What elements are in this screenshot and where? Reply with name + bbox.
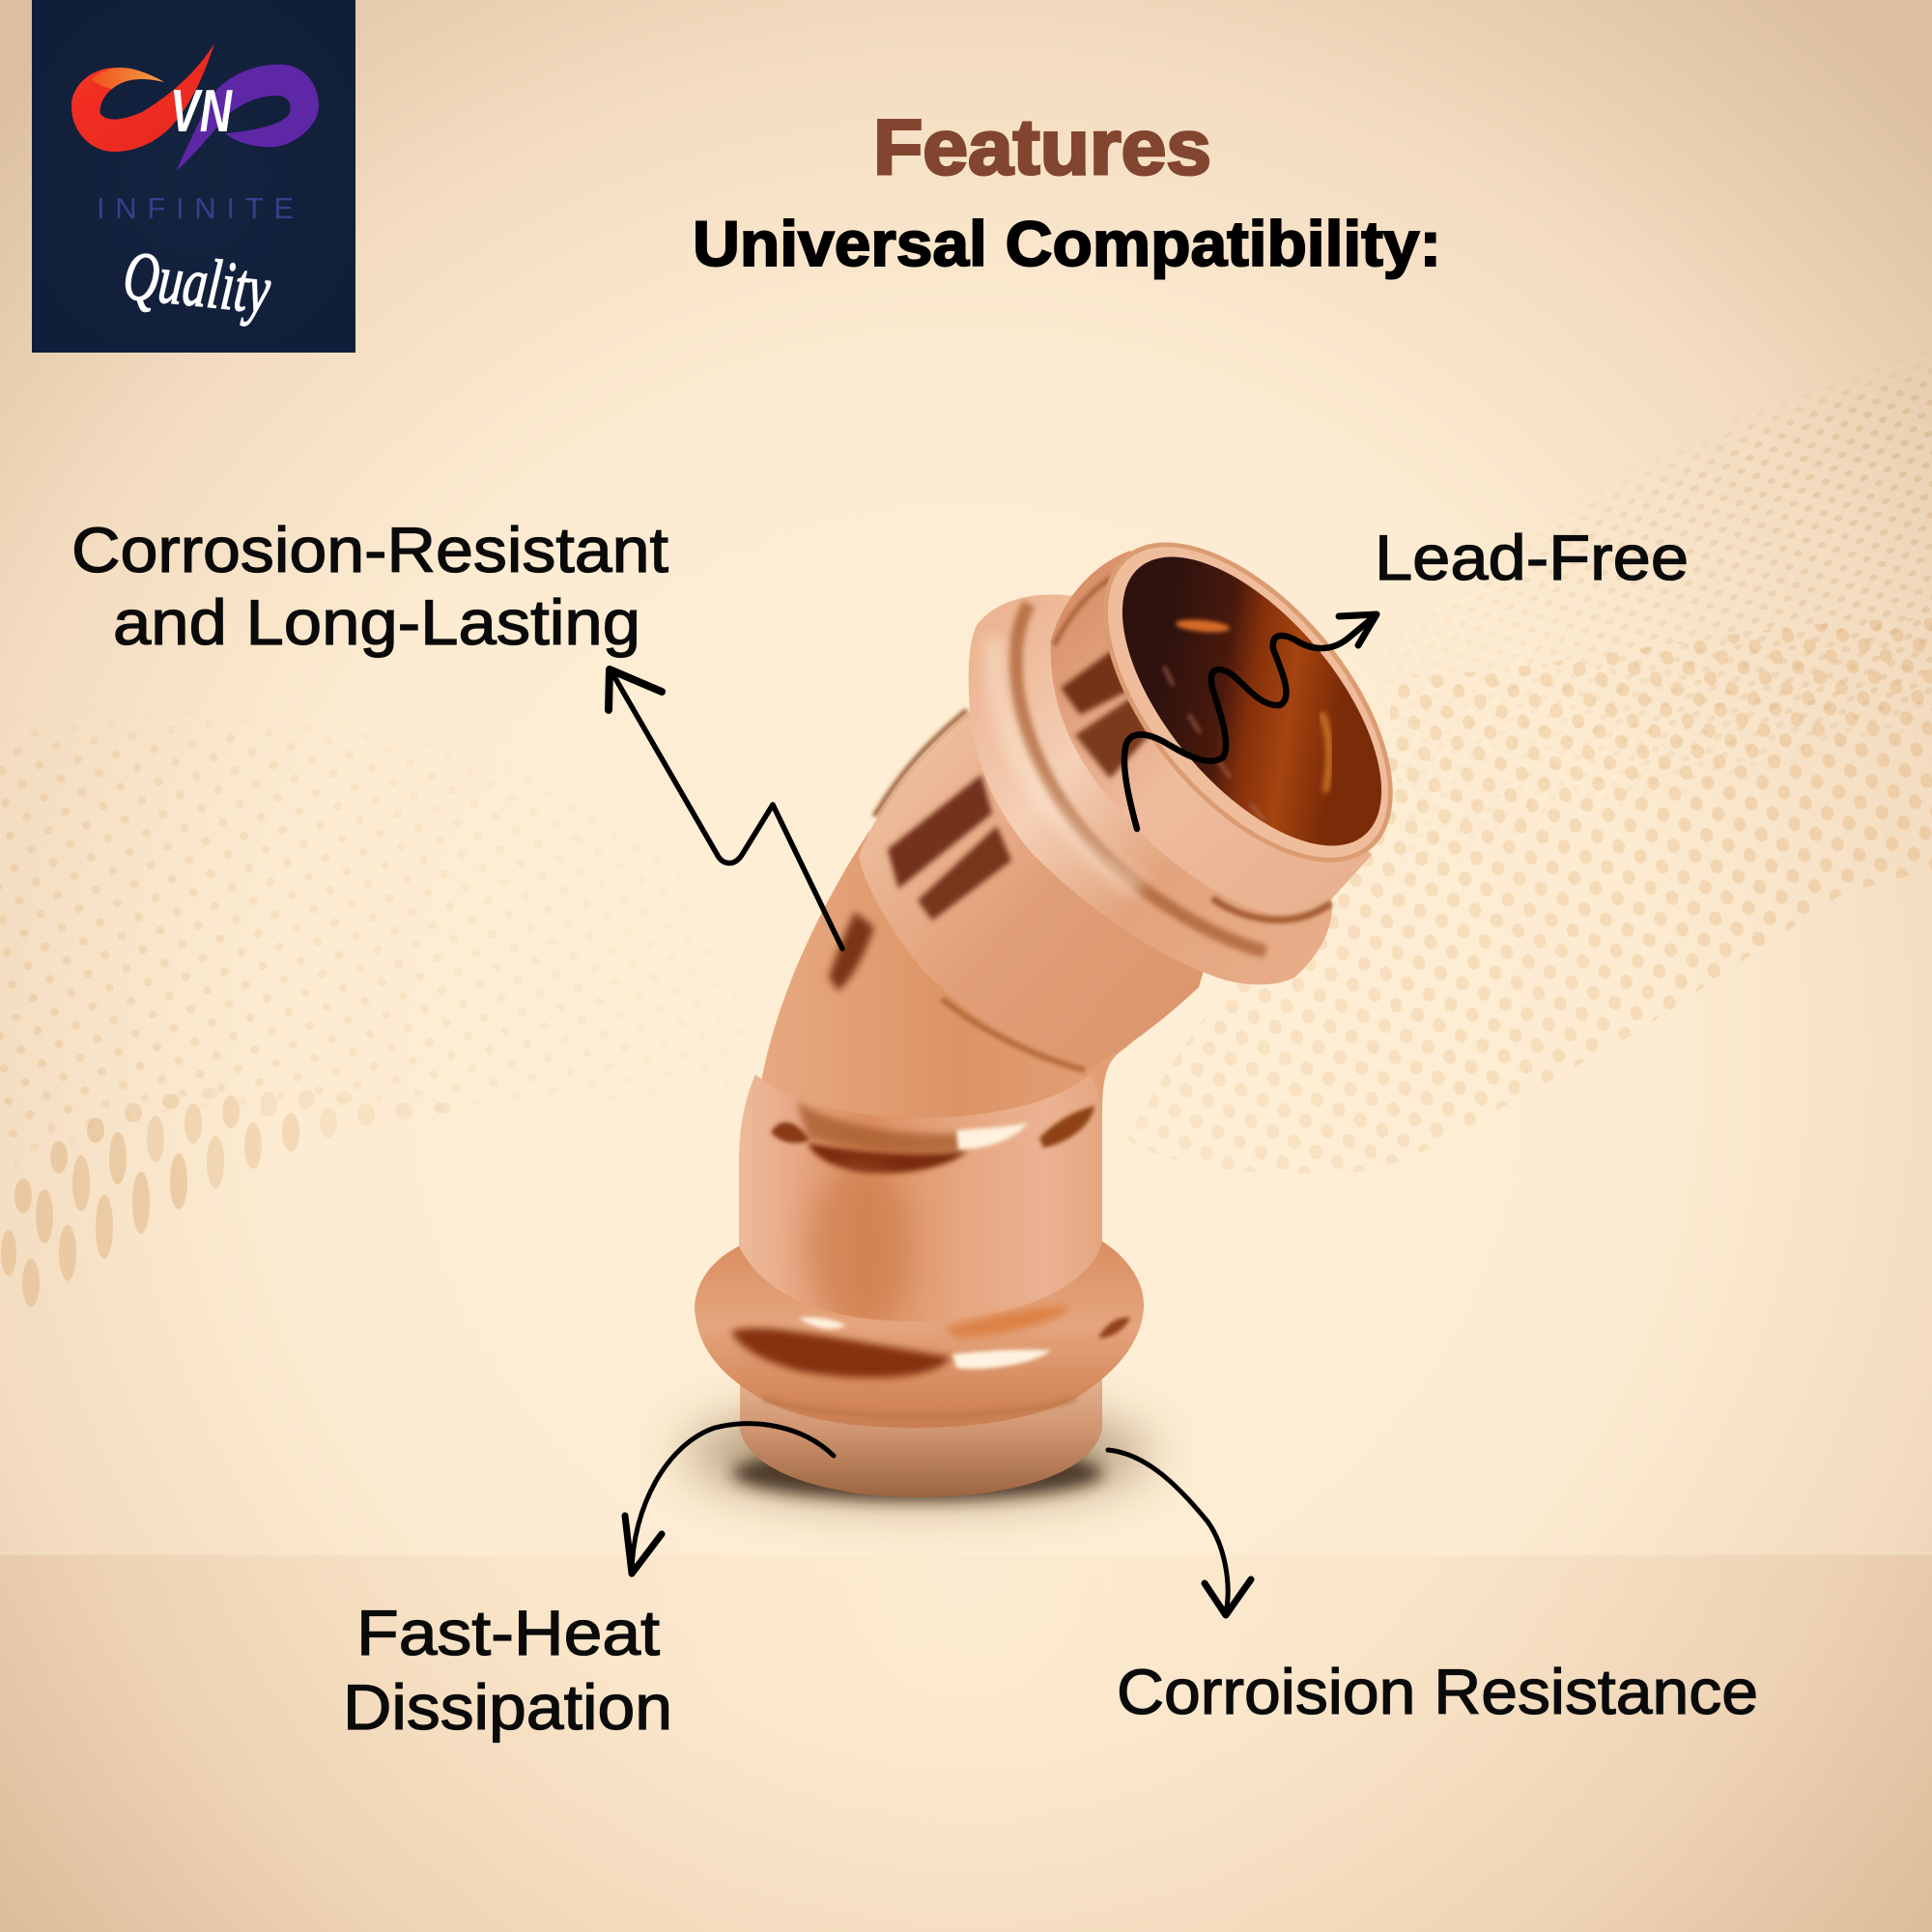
label: corrosion-resistant: and Long-Lasting (113, 586, 640, 658)
label: corrosion-resistant: Corrosion-Resistant (71, 514, 668, 585)
dark reflection on elbow (829, 912, 874, 991)
subtitle: Universal Compatibility: (693, 208, 1441, 279)
ground shadow (686, 1407, 1150, 1500)
top groove reflections (771, 1101, 1094, 1174)
label: fast-heat dissipation (343, 1597, 672, 1743)
arrow: zigzag to corrosion-resistant (609, 669, 842, 949)
label: corroision resistance: Corroision Resistance (1117, 1656, 1758, 1727)
arrow: curved to corroision resistance (1108, 1450, 1251, 1615)
logo text: INFINITE: INFINITE (97, 191, 294, 225)
title: Features (873, 104, 1211, 191)
arrow: curved to fast-heat dissipation (625, 1424, 834, 1574)
bottom band (0, 1555, 1932, 1932)
dot wave: left (0, 724, 605, 1167)
flange ring (969, 595, 1332, 984)
arrow: wavy to lead-free (1124, 614, 1377, 829)
base stub (740, 1367, 1102, 1497)
body tonal patch (807, 1169, 913, 1323)
label: fast-heat dissipation: Fast-Heat (356, 1597, 660, 1668)
top socket (1051, 551, 1372, 920)
dot wave: right upper faint (1455, 364, 1932, 784)
logo mark: purple loop (176, 65, 319, 172)
bottom flare ring (695, 1241, 1144, 1428)
copper elbow fitting (686, 492, 1447, 1500)
label: lead-free: Lead-Free (1375, 522, 1689, 593)
logo mark: red loop (71, 43, 214, 152)
logo mark: VN letters: VN (170, 78, 233, 145)
dot wave: right (1126, 618, 1932, 1174)
middle angled socket (859, 707, 1208, 1070)
pipe mouth (1049, 492, 1447, 913)
vertical cylinder (739, 1074, 1102, 1347)
elbow bend (758, 831, 1198, 1169)
logo text: Quality: Quality (120, 237, 274, 328)
label: fast-heat dissipation: Dissipation (343, 1671, 672, 1743)
label: corrosion-resistant (71, 514, 668, 658)
large dots: bottom left (1, 1088, 451, 1307)
logo panel (32, 0, 355, 353)
